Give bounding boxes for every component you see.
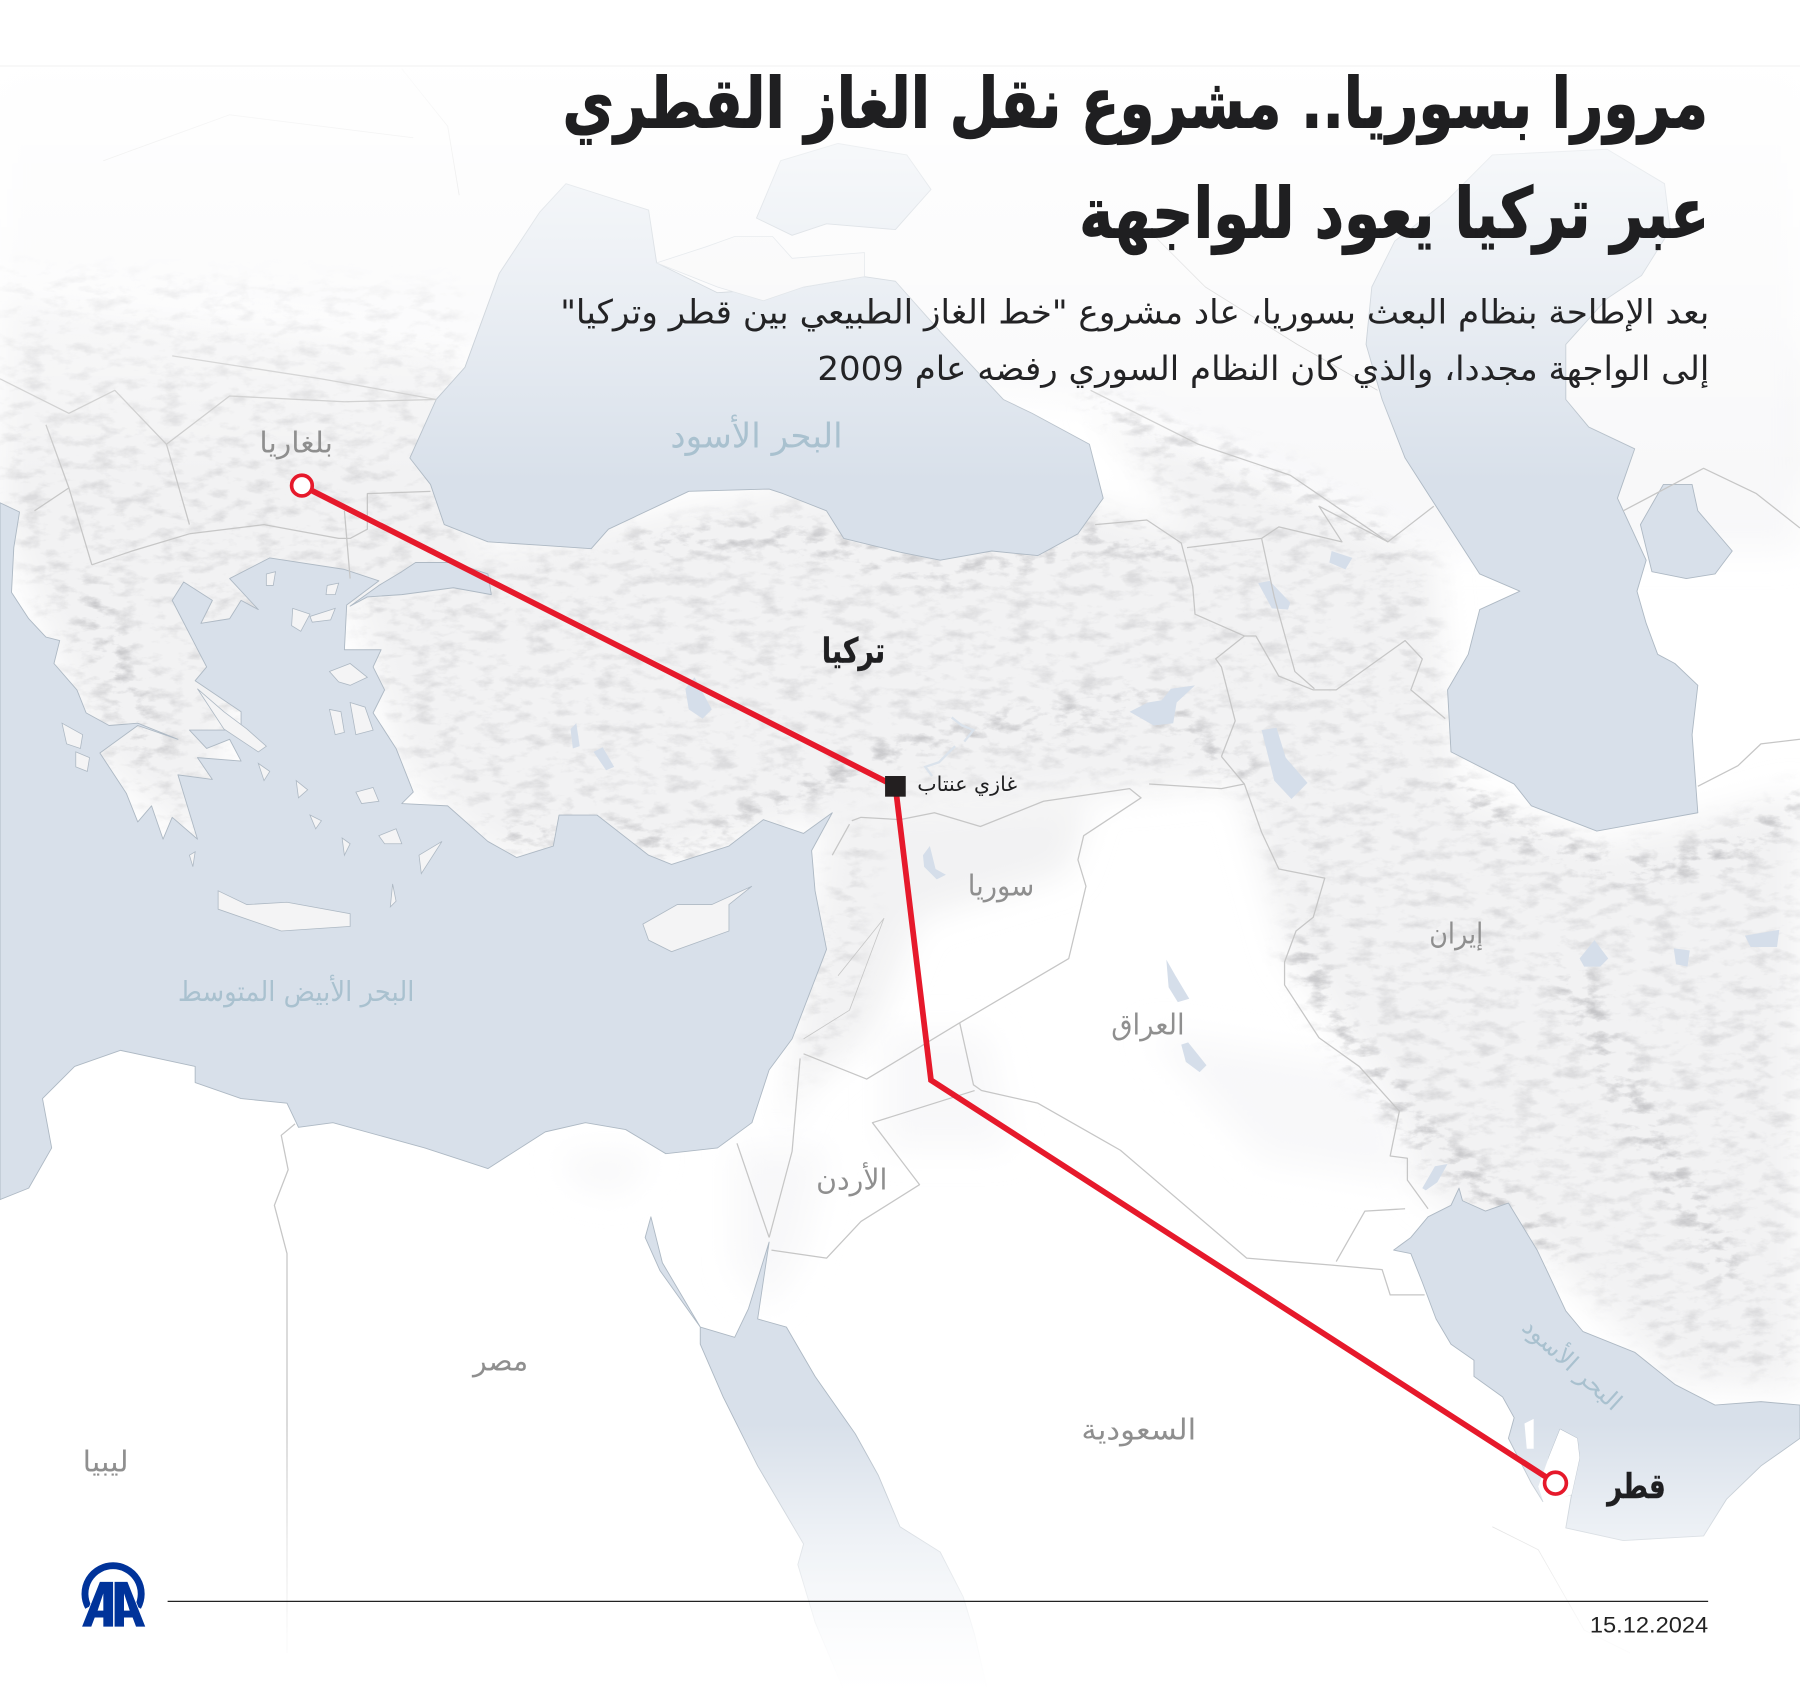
Bahrain: [1524, 1419, 1534, 1449]
country labels: ليبيا: [83, 1445, 129, 1479]
Gaziantep marker: [885, 776, 906, 797]
Qatar peninsula: [1538, 1429, 1580, 1504]
end marker: Qatar: [1545, 1472, 1566, 1494]
subtitle: [560, 293, 1709, 389]
bold labels: Turkey, Qatar, Gaziantep: غازي عنتاب: [917, 772, 1017, 796]
bold labels: Turkey, Qatar, Gaziantep: [822, 631, 1666, 1507]
country labels: العراق: [1111, 1007, 1185, 1041]
Persian Gulf: [1394, 1188, 1800, 1541]
islands: [62, 236, 1580, 1504]
sea labels: البحر الأسود: [1517, 1312, 1628, 1416]
country labels: [83, 425, 1483, 1479]
country labels: السعودية: [1081, 1413, 1196, 1447]
Lesbos: [329, 664, 367, 685]
country labels: سوريا: [968, 868, 1034, 902]
country labels: بلغاريا: [259, 425, 333, 459]
Sea of Marmara: [350, 562, 491, 606]
Chios and Samos: [329, 709, 344, 735]
subtitle: بعد الإطاحة بنظام البعث بسوريا، عاد مشروع "خط الغاز الطبيعي بين قطر وتركيا": [560, 293, 1709, 333]
footer rule: [168, 1600, 1708, 1602]
Euboea: [197, 689, 266, 752]
sea labels: [178, 415, 1628, 1416]
subtitle: إلى الواجهة مجددا، والذي كان النظام السوري رفضه عام 2009: [817, 349, 1709, 389]
country labels: الأردن: [816, 1160, 887, 1196]
AA logo: [82, 1566, 145, 1627]
Black Sea: [410, 184, 1103, 560]
sea labels: البحر الأسود: [670, 415, 843, 457]
Mediterranean and Aegean sea: [0, 503, 832, 1200]
Red Sea and gulfs: [645, 1217, 987, 1690]
start marker: Bulgaria: [292, 475, 312, 496]
title: [563, 62, 1709, 255]
lakes: [571, 551, 1779, 1190]
small Aegean islands: [266, 572, 276, 585]
country labels: مصر: [471, 1344, 528, 1378]
date: 15.12.2024: [1590, 1612, 1708, 1637]
Sea of Azov: [757, 143, 931, 235]
bold labels: Turkey, Qatar, Gaziantep: تركيا: [822, 631, 885, 671]
Garabogaz bay: [1640, 484, 1732, 579]
Crete: [218, 891, 350, 931]
country labels: إيران: [1429, 917, 1483, 952]
Cyprus: [643, 886, 752, 952]
pipeline route: [292, 475, 1566, 1494]
terrain relief texture: [0, 264, 1800, 1378]
Crimea: [657, 236, 864, 301]
bold labels: Turkey, Qatar, Gaziantep: قطر: [1606, 1467, 1666, 1507]
Rhodes: [419, 841, 442, 874]
sea labels: البحر الأبيض المتوسط: [178, 974, 414, 1008]
Caspian Sea: [1366, 149, 1698, 831]
